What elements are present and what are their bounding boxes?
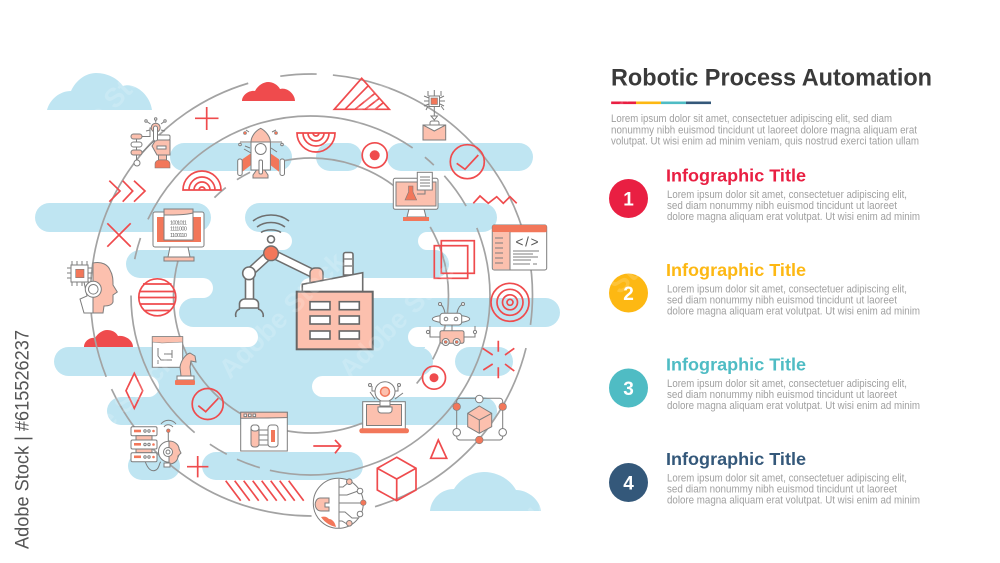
icon: window with chess knight [152, 337, 196, 385]
icon: red diamond [126, 373, 143, 408]
heading 4: Infographic Title [666, 449, 806, 469]
watermark: Adobe Stock [213, 246, 352, 384]
icon: cube with nodes [453, 395, 507, 444]
icon: red target top [362, 143, 387, 168]
icon: monitor with flask [393, 172, 438, 221]
number badge 3 [609, 368, 648, 408]
icon: code window [492, 225, 547, 270]
intro paragraph: volutpat. Ut wisi enim ad minim veniam, quis nostrud exerci tation ullam [611, 136, 919, 148]
forearm and gripper [246, 278, 254, 300]
icon: monitor with binary code [153, 209, 204, 261]
item 3 [609, 354, 920, 412]
icon: robot hand touch [131, 118, 170, 168]
watermark: Adobe Stock [43, 346, 182, 484]
watermark [33, 6, 677, 549]
icon: red plus top [195, 107, 218, 130]
body 2: sed diam nonummy nibh euismod tincidunt ut laoreet [667, 294, 897, 306]
icon: red small triangle [431, 440, 447, 458]
watermark: Adobe Stock [538, 226, 677, 364]
icon: red cube [377, 457, 416, 501]
icon: red concentric target [491, 283, 529, 321]
icon: server and head [131, 420, 181, 471]
icon: red arrow [313, 440, 341, 453]
heading 1: Infographic Title [666, 166, 806, 186]
intro paragraph [611, 113, 919, 148]
body 4: dolore magna aliquam erat volutpat. Ut wisi enim ad minim [667, 494, 920, 506]
watermark: Adobe Stock [33, 41, 172, 179]
icon: laptop with bulb [359, 382, 409, 433]
item 2 [609, 260, 920, 318]
icon: red burst [483, 341, 514, 378]
body 4: Lorem ipsum dolor sit amet, consectetuer adipiscing elit, [667, 472, 907, 484]
central icon: robot arm with factory [236, 215, 373, 349]
wifi signal arcs [253, 215, 289, 232]
body 3 [667, 378, 920, 412]
heading 3: Infographic Title [666, 354, 806, 374]
icon: red overlapping squares [434, 241, 474, 278]
factory body [297, 292, 373, 349]
background blue pill bands [35, 143, 560, 480]
body 3: dolore magna aliquam erat volutpat. Ut wisi enim ad minim [667, 400, 920, 412]
number badge 1 [609, 179, 648, 218]
ring: outer dashed [90, 74, 532, 516]
roof [302, 273, 363, 292]
icon: red striped ball [139, 279, 176, 316]
cloud: left red [84, 330, 133, 347]
icon: chip and briefcase [423, 90, 446, 140]
ring: inner dashed [174, 158, 448, 433]
upper arm [271, 253, 316, 275]
body 1: Lorem ipsum dolor sit amet, consectetuer adipiscing elit, [667, 189, 907, 201]
number badge 4 [609, 463, 648, 502]
body 2: dolore magna aliquam erat volutpat. Ut wisi enim ad minim [667, 306, 920, 318]
icon: red target bottom [422, 366, 446, 389]
body 2 [667, 284, 920, 318]
watermark: Adobe Stock [503, 411, 642, 549]
number badge 1: 1 [623, 189, 634, 210]
body 1: sed diam nonummy nibh euismod tincidunt ut laoreet [667, 200, 897, 212]
icon: brain circuit circle [313, 478, 366, 528]
body 4 [667, 472, 920, 506]
icon: red hatch lines [226, 481, 304, 501]
cloud: top left blue [47, 73, 152, 110]
icon: red check circle bottom [192, 388, 223, 420]
icon: red half disk top [297, 133, 335, 152]
icon: monitor with binary code: 1001011 [170, 220, 187, 226]
intro paragraph: Lorem ipsum dolor sit amet, consectetuer adipiscing elit, sed diam [611, 113, 892, 125]
title: Robotic Process Automation [611, 64, 932, 92]
icon: monitor with binary code: 1111000 [170, 227, 187, 233]
chimney [344, 252, 353, 275]
number badge 2 [609, 274, 648, 312]
body 3: sed diam nonummy nibh euismod tincidunt ut laoreet [667, 389, 897, 401]
stock id side label: Adobe Stock | #615526237 [12, 330, 34, 549]
ring: middle dashed [131, 116, 490, 475]
body 1: dolore magna aliquam erat volutpat. Ut wisi enim ad minim [667, 211, 920, 223]
icon: robot head with chip [67, 261, 117, 313]
number badge 2: 2 [623, 284, 634, 305]
icon: books window [241, 412, 287, 451]
icon: code window: </> [516, 234, 539, 250]
watermark: Adobe Stock [333, 246, 472, 384]
number badge 3: 3 [623, 379, 634, 400]
icon: red zigzag [473, 196, 517, 203]
watermark: Adobe Stock [503, 76, 642, 214]
number badge 4: 4 [623, 473, 634, 494]
cloud: bottom right blue [430, 472, 541, 511]
icon: red cross [107, 223, 131, 247]
item 1 [609, 166, 920, 223]
icon: red hatched triangle [334, 78, 389, 109]
icon: red plus bottom [187, 456, 208, 477]
body 3: Lorem ipsum dolor sit amet, consectetuer adipiscing elit, [667, 378, 907, 390]
icon: red check circle top [450, 145, 484, 179]
shoulder [310, 268, 323, 285]
body 4: sed diam nonummy nibh euismod tincidunt ut laoreet [667, 484, 897, 496]
icon: monitor with binary code: 1100110 [170, 233, 187, 239]
intro paragraph: nonummy nibh euismod tincidunt ut laoreet dolore magna aliquam erat [611, 124, 917, 136]
icon: red half rainbow [183, 171, 221, 190]
watermark: Adobe Stock [328, 6, 467, 144]
body 2: Lorem ipsum dolor sit amet, consectetuer adipiscing elit, [667, 284, 907, 296]
body 1 [667, 189, 920, 223]
icon: robot on wheels [426, 302, 477, 346]
icon: red chevrons [109, 181, 145, 202]
factory windows [310, 302, 359, 339]
item 4 [609, 449, 920, 506]
icon: rocket [238, 128, 284, 178]
cloud: top red [242, 82, 295, 101]
heading 2: Infographic Title [666, 260, 806, 280]
title colour bar [611, 102, 711, 104]
